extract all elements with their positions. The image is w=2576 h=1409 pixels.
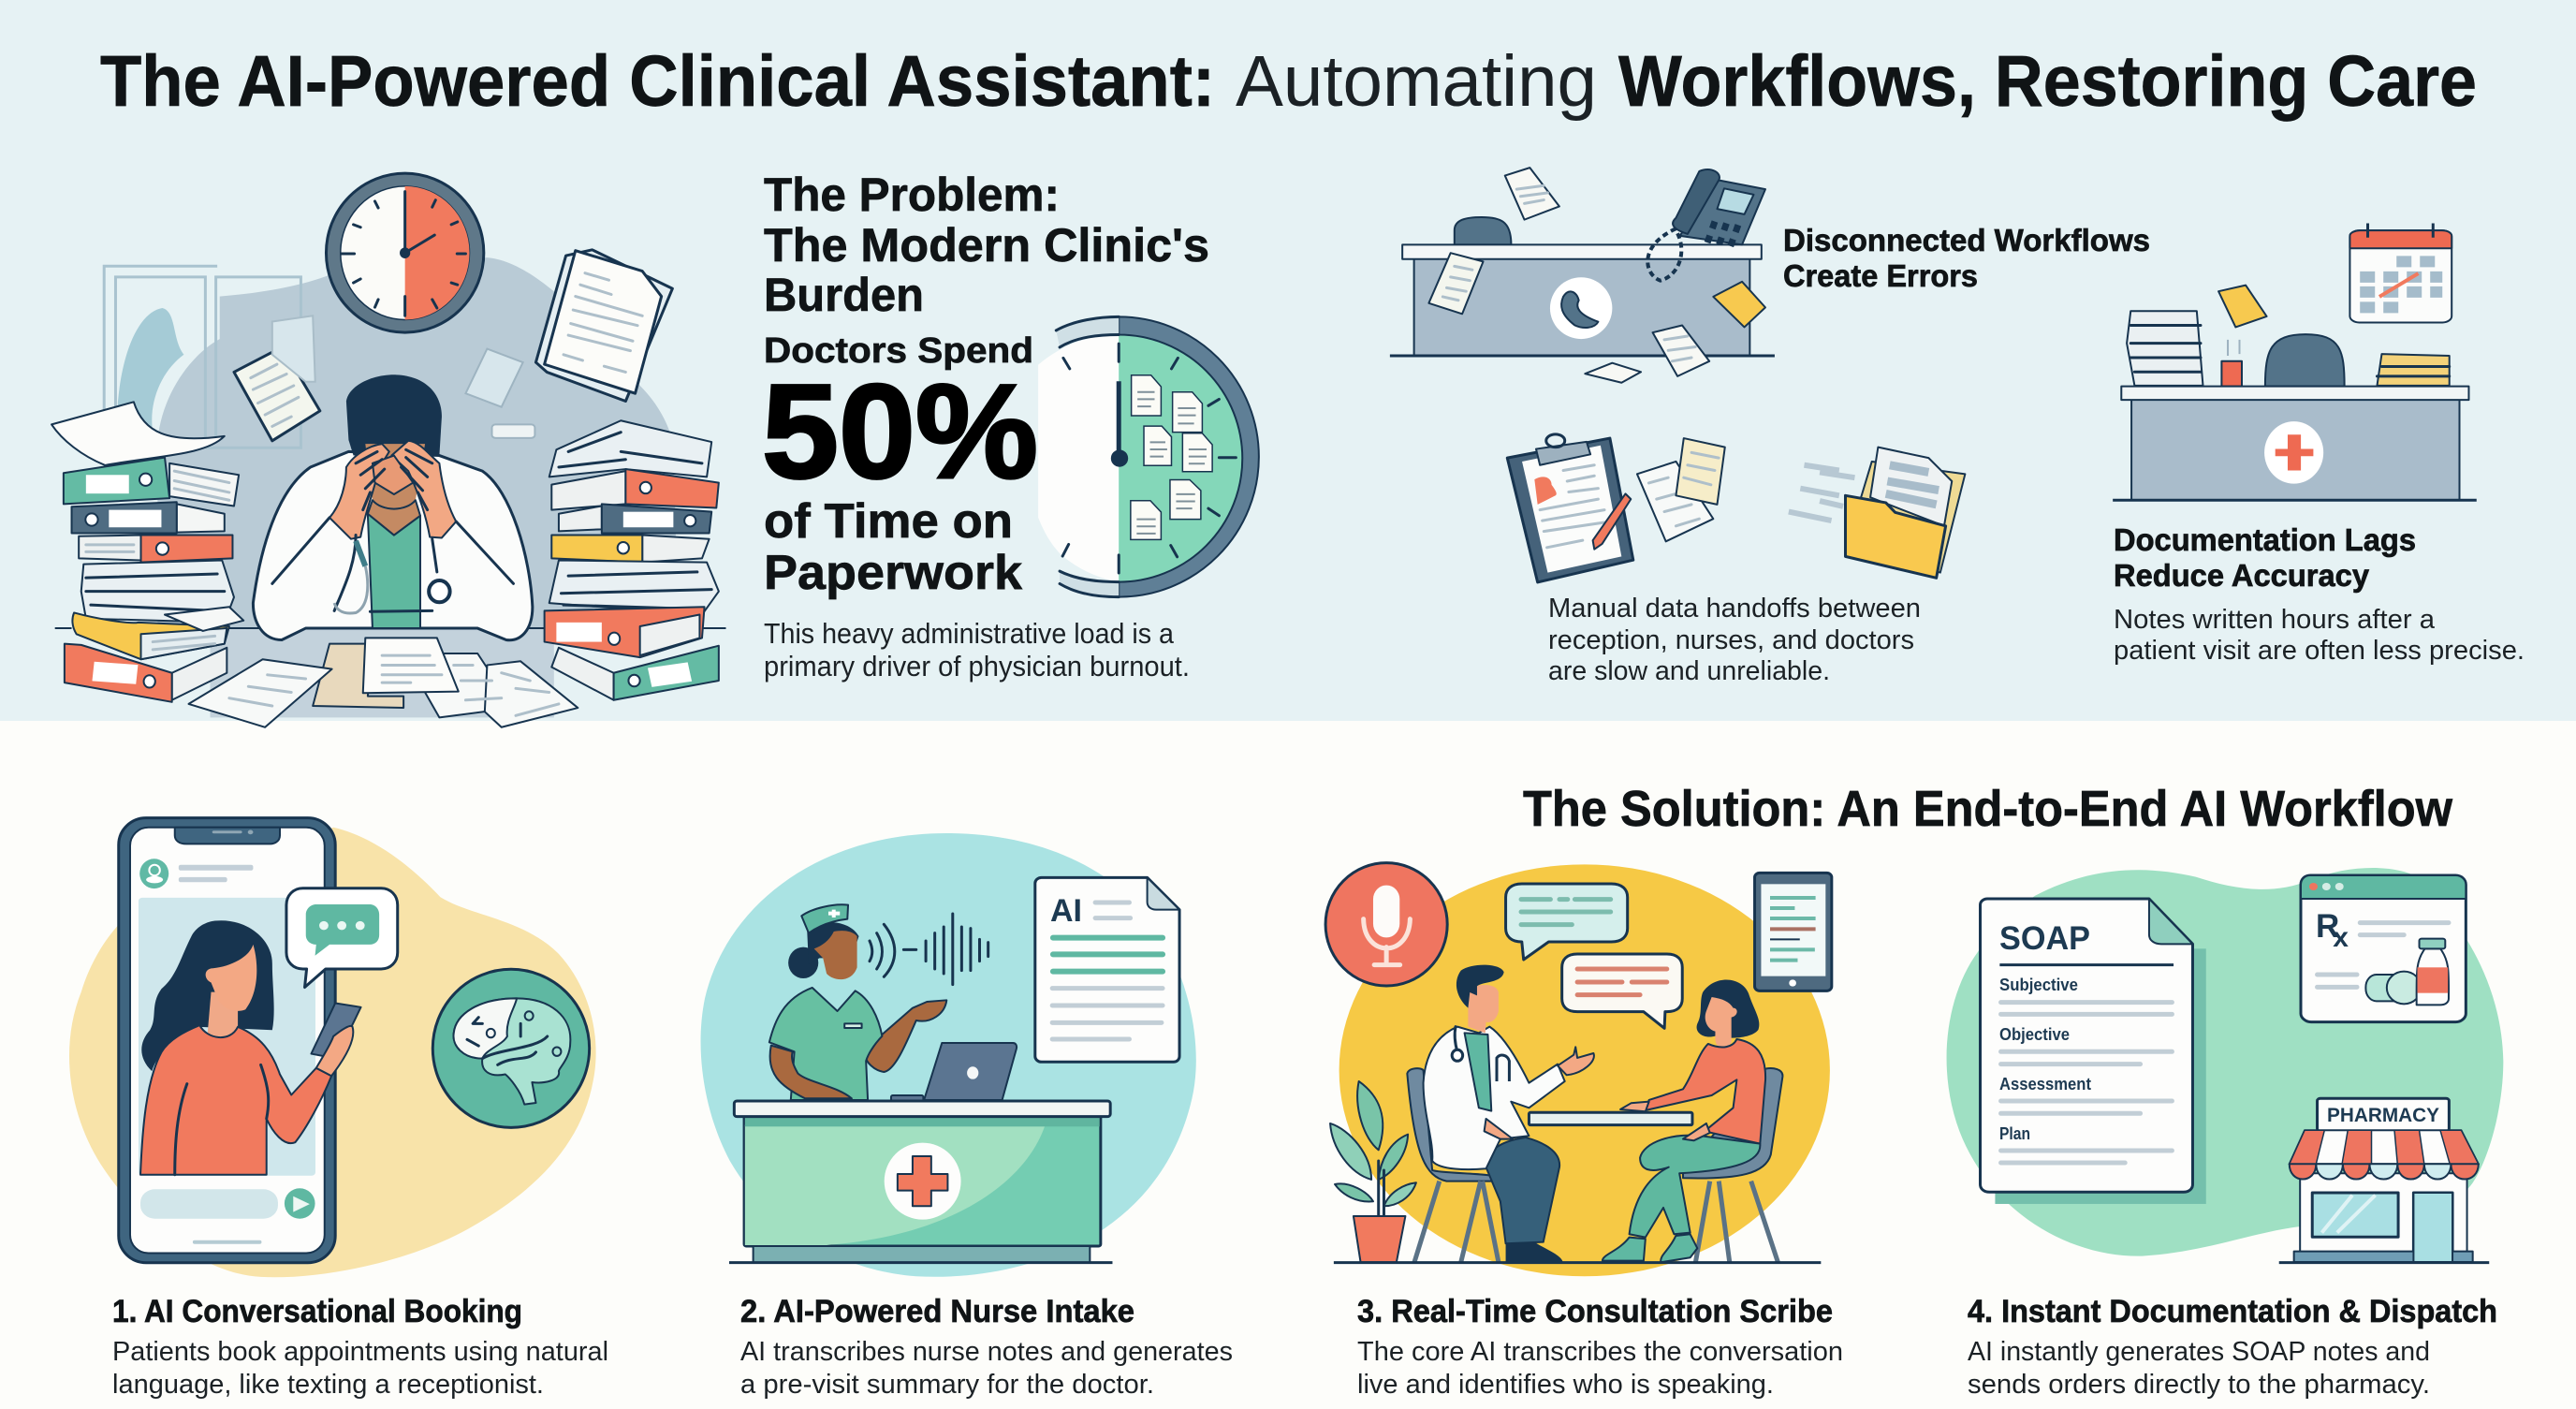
doctor [253, 374, 533, 640]
step 1 text [112, 1294, 608, 1400]
reception desk [729, 1101, 1112, 1263]
coral speech bubble [1562, 954, 1682, 1028]
heading: the problem [764, 169, 1209, 321]
text: documentation lags: Reduce Accuracy [2114, 558, 2370, 593]
step 4 text: AI instantly generates SOAP notes and [1968, 1337, 2430, 1367]
text: SOAP note labels: SOAP [1999, 920, 2090, 957]
heading: the solution: The Solution: An End-to-End AI Workflow [1523, 781, 2453, 837]
text: SOAP note labels: Objective [1999, 1025, 2070, 1044]
text: disconnected workflows: Create Errors [1783, 258, 1978, 293]
nurse [769, 904, 946, 1100]
title: Workflows, Restoring Care [1618, 41, 2477, 122]
step 4 text: sends orders directly to the pharmacy. [1968, 1370, 2430, 1400]
teal speech bubble [1506, 884, 1628, 960]
text: documentation lags: Notes written hours after a [2114, 605, 2436, 635]
illustration: desk with calendar [2113, 223, 2477, 500]
step 3 text [1357, 1294, 1843, 1400]
icon: AI brain [432, 969, 590, 1127]
desk surface [210, 628, 554, 717]
panel: problem background [0, 0, 2576, 721]
title: Automating [1236, 41, 1597, 122]
microphone icon [1325, 863, 1447, 986]
illustration: clipboard, notes and folder [1507, 434, 1965, 582]
step 4 text [1968, 1294, 2497, 1400]
text: burnout note [764, 617, 1190, 682]
text: documentation lags: patient visit are often less precise. [2114, 636, 2525, 666]
text: documentation lags: Documentation Lags [2114, 522, 2416, 557]
window [104, 266, 300, 448]
stat: doctors spend 50 percent: Doctors Spend [764, 331, 1033, 371]
patient in chair [1603, 980, 1782, 1262]
prescription window [2301, 875, 2466, 1022]
step 2 text: AI transcribes nurse notes and generates [740, 1337, 1233, 1367]
desk papers [189, 638, 578, 727]
left binder stack [51, 402, 243, 702]
SOAP note document [1981, 899, 2206, 1204]
text: manual data handoffs [1548, 594, 1921, 686]
text: manual data handoffs: Manual data handoffs between [1548, 594, 1921, 624]
heading: the problem: The Modern Clinic's [764, 219, 1209, 272]
right binder stack [545, 420, 719, 700]
step 2 illustration: nurse intake [701, 833, 1196, 1277]
step 3 text: live and identifies who is speaking. [1357, 1370, 1774, 1400]
chat bubble [286, 888, 398, 988]
text: disconnected workflows: Disconnected Workflows [1783, 223, 2150, 257]
smartphone [119, 818, 335, 1263]
yellow circle [1339, 864, 1830, 1276]
doctor in chair [1407, 965, 1594, 1262]
step 3 text: The core AI transcribes the conversation [1357, 1337, 1843, 1367]
message input [140, 1188, 315, 1244]
step 2 text: 2. AI-Powered Nurse Intake [740, 1294, 1134, 1329]
illustration: reception desk with phone [1390, 168, 1775, 383]
text: burnout note: primary driver of physician burnout. [764, 650, 1190, 682]
floating note stack [535, 250, 672, 402]
laptop [891, 1043, 1017, 1101]
AI summary document [1035, 877, 1179, 1062]
text: Rx symbol: R [2316, 908, 2339, 945]
document icons [1131, 375, 1212, 539]
text: SOAP note labels: Assessment [1999, 1075, 2091, 1093]
tablet [1755, 873, 1832, 991]
text: SOAP note labels: Subjective [1999, 976, 2078, 994]
text: Rx symbol: x [2333, 922, 2349, 953]
mint half of dial [1119, 335, 1242, 582]
step 3 illustration: consultation scribe [1325, 863, 1832, 1276]
stat: doctors spend 50 percent: Paperwork [764, 546, 1022, 600]
text: disconnected workflows [1783, 223, 2150, 293]
step 1 text: language, like texting a receptionist. [112, 1370, 544, 1400]
white half of dial [1038, 335, 1119, 582]
mint blob [1947, 868, 2503, 1256]
title: The AI-Powered Clinical Assistant: [100, 41, 1215, 122]
text: manual data handoffs: reception, nurses, and doctors [1548, 625, 1914, 655]
chart: 50% clock with documents [1038, 316, 1259, 597]
stat: doctors spend 50 percent [762, 331, 1038, 600]
heading: the problem: The Problem: [764, 169, 1060, 221]
outer ring [1119, 316, 1259, 597]
wall notes [465, 349, 523, 407]
calendar [2349, 223, 2452, 322]
text: SOAP note labels [1999, 920, 2091, 1143]
desk edge [55, 627, 726, 629]
teal blob [701, 833, 1196, 1277]
panel: solution background [0, 721, 2576, 1409]
stat: doctors spend 50 percent: of Time on [764, 494, 1013, 549]
table [1529, 1112, 1692, 1125]
pharmacy storefront [2279, 1098, 2489, 1263]
yellow blob [69, 828, 596, 1277]
step 1 illustration: conversational booking [69, 818, 596, 1277]
text: AI badge on document: AI [1050, 893, 1082, 929]
text: SOAP note labels: Plan [1999, 1124, 2030, 1143]
step 4 text: 4. Instant Documentation & Dispatch [1968, 1294, 2497, 1329]
text: manual data handoffs: are slow and unreliable. [1548, 656, 1830, 686]
illustration: overwhelmed doctor with paperwork [51, 173, 726, 727]
wall clock [326, 173, 484, 332]
step 2 text: a pre-visit summary for the doctor. [740, 1370, 1154, 1400]
desk phone [1647, 169, 1765, 281]
floating note [234, 353, 320, 441]
text: documentation lags [2114, 522, 2525, 666]
step 1 text: Patients book appointments using natural [112, 1337, 608, 1367]
step 4 illustration: documentation and dispatch [1947, 868, 2503, 1263]
heading: the problem: Burden [764, 269, 924, 321]
text: pharmacy sign: PHARMACY [2327, 1105, 2439, 1126]
text: burnout note: This heavy administrative load is a [764, 617, 1175, 650]
clock ticks and hand [1062, 344, 1236, 573]
step 1 text: 1. AI Conversational Booking [112, 1294, 522, 1329]
plant [1330, 1081, 1416, 1262]
background blob [157, 257, 678, 628]
stat: doctors spend 50 percent: 50% [762, 358, 1038, 506]
step 3 text: 3. Real-Time Consultation Scribe [1357, 1294, 1833, 1329]
sound wave [870, 914, 988, 985]
step 2 text [740, 1294, 1233, 1400]
woman with phone [140, 920, 361, 1175]
